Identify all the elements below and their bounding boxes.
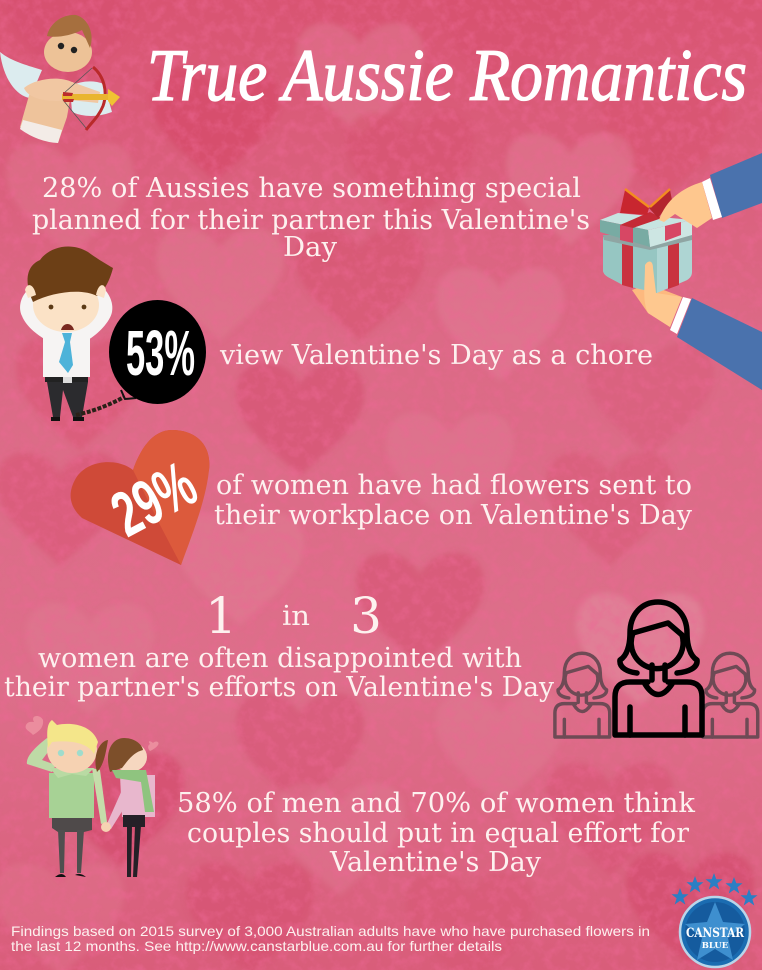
text: equal effort: Valentine's Day	[329, 847, 542, 878]
text: equal effort	[177, 788, 696, 878]
text: something special	[32, 173, 590, 263]
heart with 29%	[71, 430, 209, 565]
icon: three women	[555, 602, 758, 737]
footer note	[11, 923, 650, 954]
text: flowers: their workplace on Valentine's Day	[214, 500, 693, 531]
text: flowers: of women have had flowers sent to	[216, 470, 692, 501]
icon: couple	[26, 716, 159, 877]
text: flowers	[214, 470, 693, 531]
black ball with 53%: 53%	[126, 317, 195, 389]
black ball with 53%	[109, 300, 206, 404]
text: equal effort: couples should put in equal effort for	[187, 818, 689, 849]
icon: gift in hands	[600, 153, 762, 390]
logo: Canstar Blue: BLUE	[702, 941, 729, 951]
1 in 3: 3	[350, 587, 382, 645]
text: disappointed: their partner's efforts on Valentine's Day	[4, 672, 555, 703]
text: something special: Day	[283, 232, 338, 263]
text: equal effort: 58% of men and 70% of women think	[177, 788, 696, 819]
text: disappointed: women are often disappointed with	[38, 643, 522, 674]
text: disappointed	[4, 643, 555, 703]
footer note: Findings based on 2015 survey of 3,000 Australian adults have who have purchased flowers in	[11, 923, 650, 939]
1 in 3	[205, 587, 382, 645]
text: something special: planned for their partner this Valentine's	[32, 205, 590, 236]
text: chore: view Valentine's Day as a chore	[219, 340, 653, 371]
icon: man chained to ball	[20, 246, 136, 421]
heart with 29%: 29%	[100, 447, 208, 550]
footer note: the last 12 months. See http://www.canstarblue.com.au for further details	[11, 938, 502, 954]
logo: Canstar Blue	[672, 873, 758, 967]
logo: Canstar Blue: CANSTAR	[686, 926, 744, 941]
1 in 3: in	[282, 601, 310, 632]
text: something special: 28% of Aussies have something special	[42, 173, 581, 204]
1 in 3: 1	[205, 587, 237, 645]
icon: cupid	[0, 15, 120, 143]
